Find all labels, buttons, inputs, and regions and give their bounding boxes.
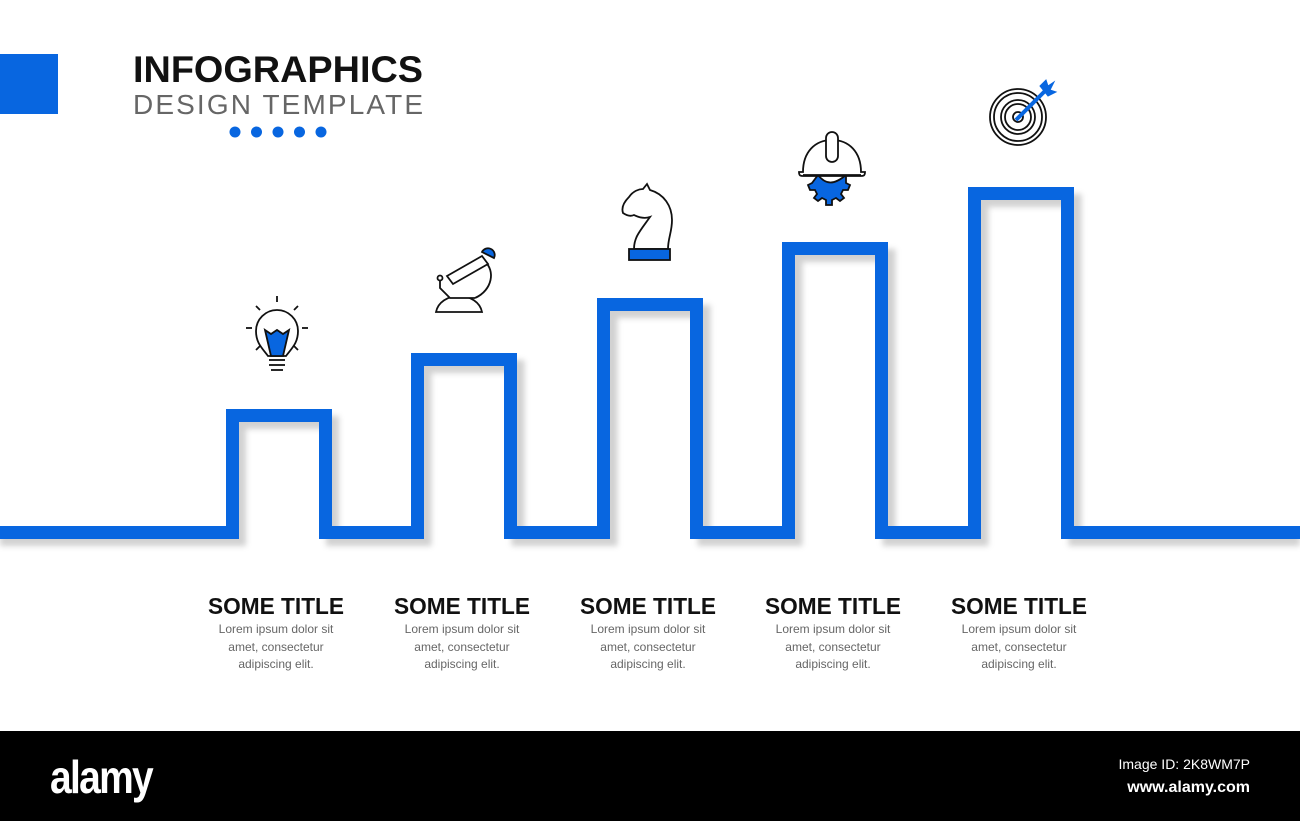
step texts: SOME TITLE [765,593,901,619]
icon: light bulb [246,296,308,370]
step texts [208,593,1087,671]
step texts: amet, consectetur [971,640,1067,654]
step texts: Lorem ipsum dolor sit [962,622,1077,636]
step texts: SOME TITLE [951,593,1087,619]
footer bar: alamy [50,751,154,803]
icon: hard hat with gear [799,132,865,205]
title: INFOGRAPHICS [133,49,423,90]
step texts: SOME TITLE [580,593,716,619]
title: DESIGN TEMPLATE [133,89,423,120]
icon: target with arrow [990,80,1056,145]
step texts: amet, consectetur [600,640,696,654]
step texts: Lorem ipsum dolor sit [405,622,520,636]
step texts: adipiscing elit. [981,657,1057,671]
step texts: SOME TITLE [394,593,530,619]
footer bar [0,731,1300,821]
step texts: Lorem ipsum dolor sit [219,622,334,636]
step texts: adipiscing elit. [424,657,500,671]
step texts: adipiscing elit. [795,657,871,671]
step texts: amet, consectetur [228,640,324,654]
step texts: SOME TITLE [208,593,344,619]
footer bar: Image ID: 2K8WM7P [1118,756,1250,772]
step texts: adipiscing elit. [610,657,686,671]
step texts: Lorem ipsum dolor sit [591,622,706,636]
corner blue square [0,54,58,114]
step texts: adipiscing elit. [238,657,314,671]
icon: microscope [436,248,495,312]
step texts: amet, consectetur [414,640,510,654]
stepped line chart [0,194,1300,540]
footer bar: www.alamy.com [1126,779,1250,796]
icon: chess knight [622,184,672,260]
title [133,49,423,120]
step texts: amet, consectetur [785,640,881,654]
title dots [230,126,326,138]
step texts: Lorem ipsum dolor sit [776,622,891,636]
